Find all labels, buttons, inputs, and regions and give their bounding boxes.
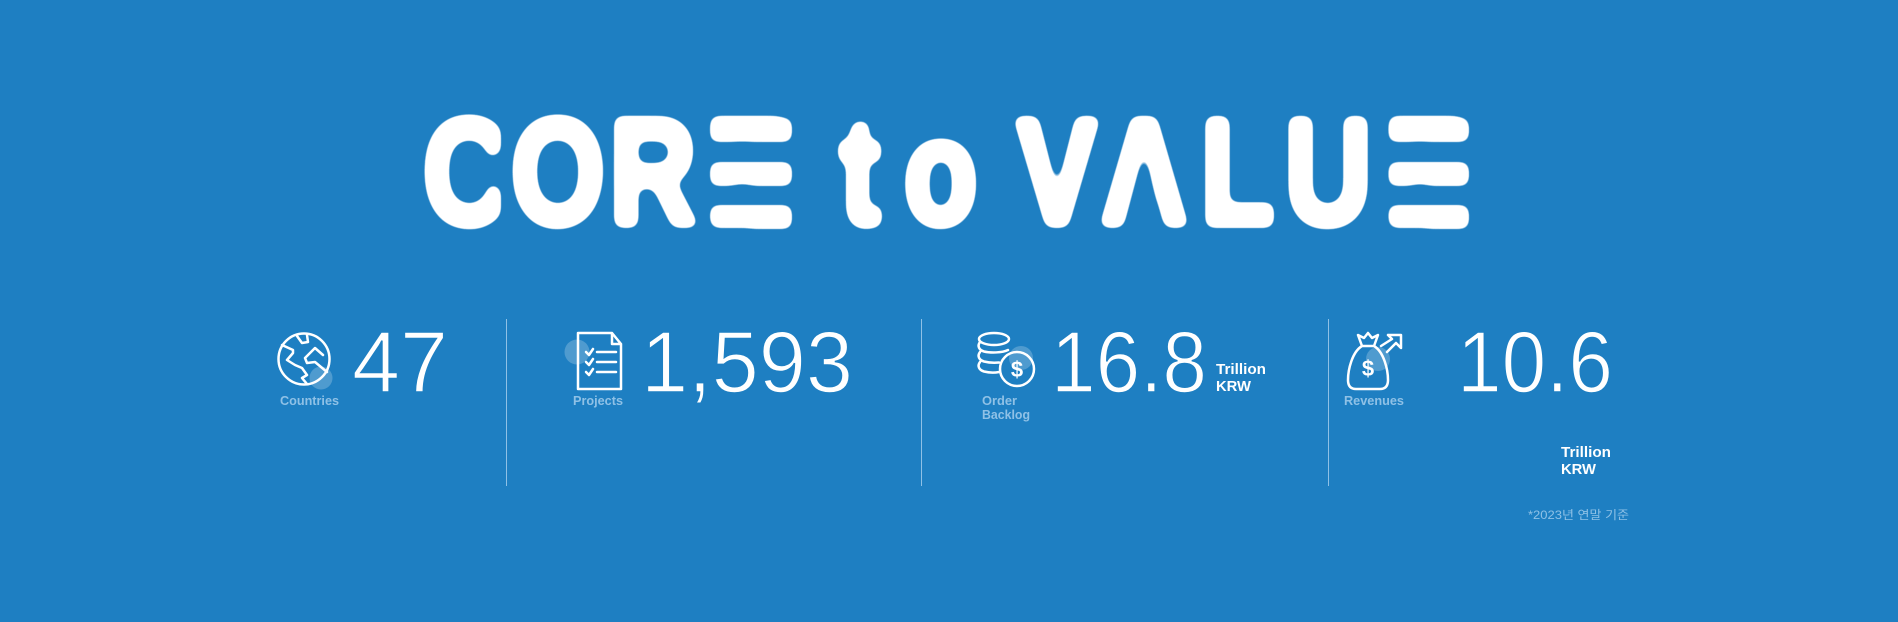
unit: trillion krw: KRW — [1561, 462, 1596, 478]
label: order backlog: Order — [982, 393, 1017, 408]
icon: coins — [979, 333, 1034, 386]
label: order backlog: Backlog — [982, 407, 1030, 422]
icon: money bag — [1348, 333, 1401, 389]
title — [424, 114, 1470, 230]
icon: document checklist — [564, 333, 621, 389]
stat: revenues — [1344, 314, 1613, 478]
stat divider 3 — [1328, 319, 1329, 486]
label: order backlog — [982, 393, 1030, 422]
unit: trillion krw — [1561, 445, 1611, 478]
dollar sign: $ — [1362, 356, 1374, 381]
value: 16.8: 16.8 — [1051, 314, 1207, 411]
label: projects: Projects — [573, 393, 623, 408]
unit: trillion krw: KRW — [1216, 379, 1251, 395]
unit: trillion krw: Trillion — [1216, 362, 1266, 378]
stat divider 1 — [506, 319, 507, 486]
value: 1,593: 1,593 — [641, 314, 853, 411]
label: revenues: Revenues — [1344, 393, 1404, 408]
icon: globe — [278, 334, 332, 390]
label: countries: Countries — [280, 393, 339, 408]
stat: countries — [278, 314, 448, 411]
footnote: *2023년 연말 기준 — [1528, 508, 1629, 522]
unit: trillion krw: Trillion — [1561, 445, 1611, 461]
stat divider 2 — [921, 319, 922, 486]
stat: order backlog — [979, 314, 1266, 422]
title: CORE to VALUE — [423, 88, 1464, 256]
stat: projects — [564, 314, 853, 411]
unit: trillion krw — [1216, 362, 1266, 395]
dollar sign: $ — [1011, 357, 1023, 382]
value: 10.6: 10.6 — [1457, 314, 1613, 411]
value: 47: 47 — [352, 314, 448, 411]
